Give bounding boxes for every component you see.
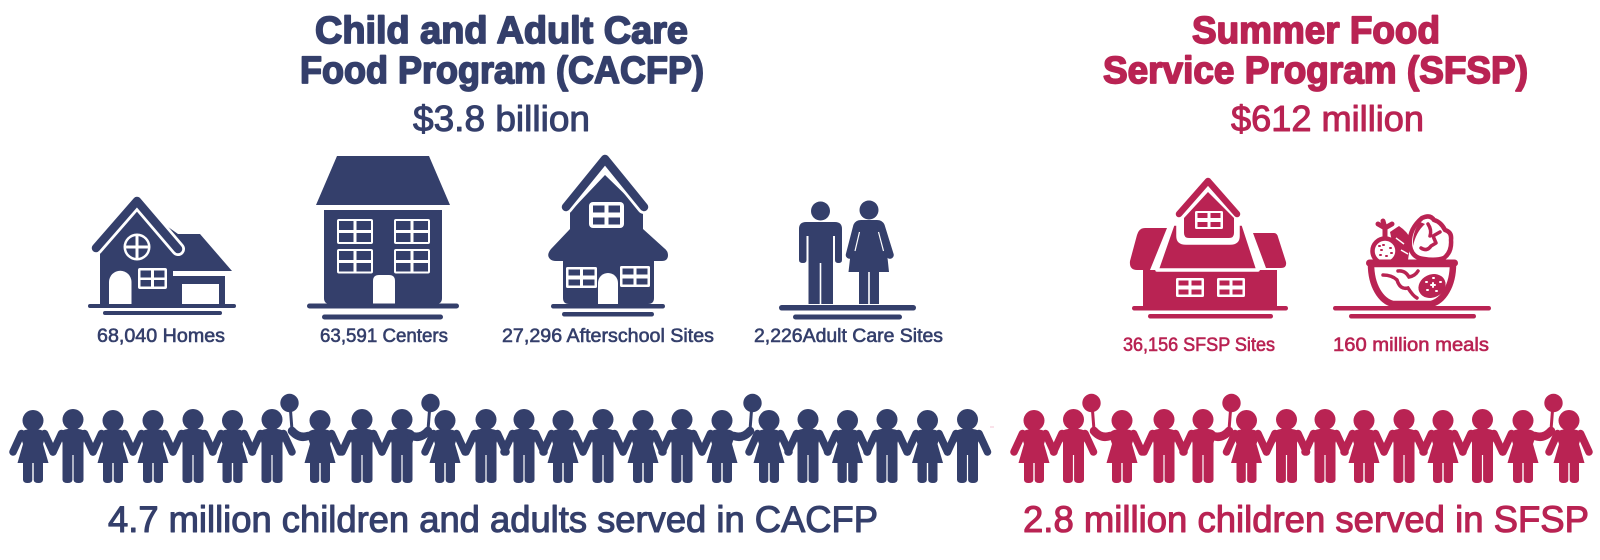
label: afterschool sites: 27,296 Afterschool Sites [502, 326, 714, 347]
label: meals: 160 million meals [1333, 335, 1489, 356]
icon: home [88, 201, 236, 315]
title: Summer Food Service Program: Summer Food [1192, 10, 1440, 52]
people row: CACFP [13, 394, 988, 483]
title: Child and Adult Care Food Program: Child and Adult Care [315, 10, 688, 52]
total served: CACFP: 4.7 million children and adults served in CACFP [108, 499, 878, 540]
heading: SFSP [1103, 10, 1528, 139]
title: Child and Adult Care Food Program: Food Program (CACFP) [300, 50, 704, 92]
heading: CACFP [300, 10, 704, 139]
icon: afterschool site [548, 159, 668, 316]
funding amount: $612 million: $612 million [1231, 98, 1424, 139]
title: Summer Food Service Program [1103, 10, 1528, 92]
title: Child and Adult Care Food Program [300, 10, 704, 92]
funding amount: $3.8 billion: $3.8 billion [413, 98, 590, 139]
icon: adult couple [779, 200, 916, 320]
icon: salad bowl [1333, 216, 1491, 318]
title: Summer Food Service Program: Service Program (SFSP) [1103, 50, 1528, 92]
total served: SFSP: 2.8 million children served in SFSP [1023, 499, 1589, 540]
label: SFSP sites: 36,156 SFSP Sites [1123, 335, 1275, 356]
label: adult care sites: 2,226Adult Care Sites [754, 326, 943, 347]
label: centers: 63,591 Centers [320, 326, 448, 347]
icon: SFSP site [1130, 181, 1288, 318]
icon: center building [307, 156, 459, 320]
label: homes: 68,040 Homes [97, 326, 225, 347]
people row: SFSP [1014, 394, 1589, 483]
